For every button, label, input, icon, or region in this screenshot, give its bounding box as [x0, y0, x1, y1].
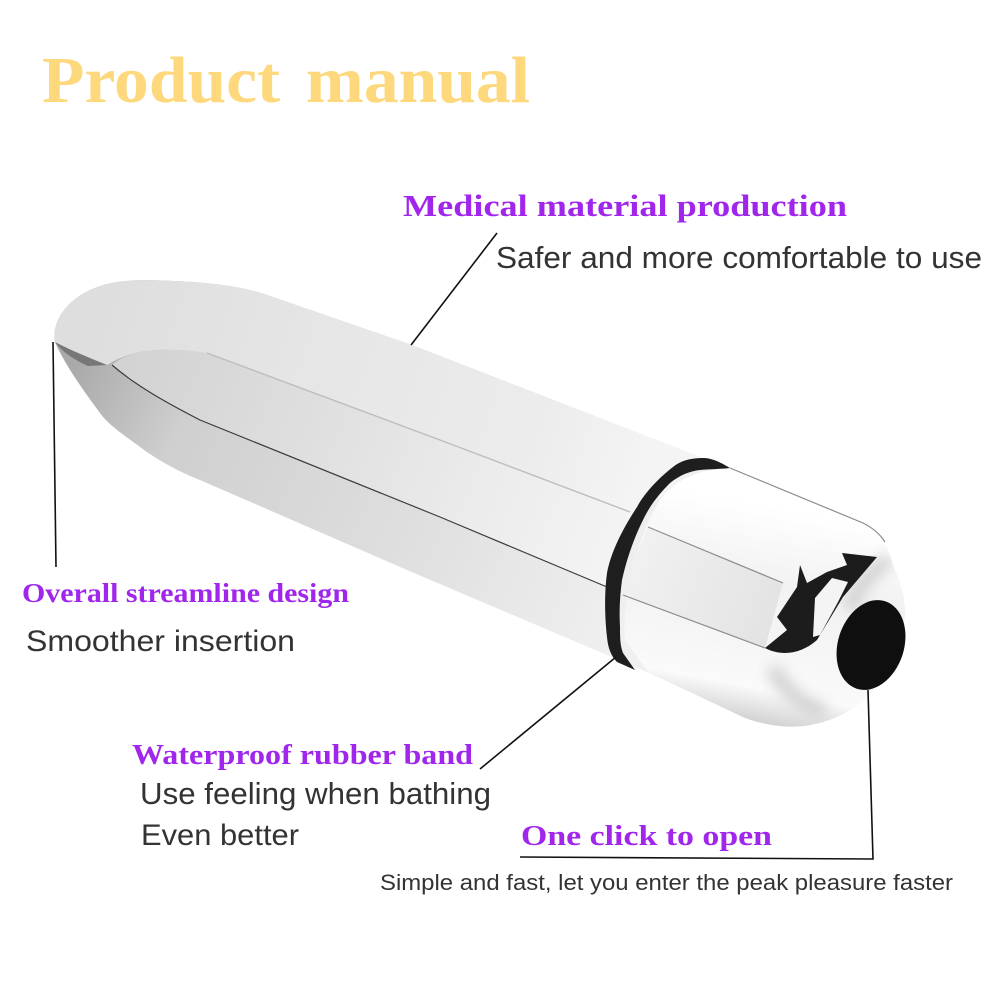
product: silver bullet body — [55, 280, 917, 727]
heading: Overall streamline design — [22, 578, 349, 608]
ring: rubber band — [605, 458, 730, 670]
description line 1: Use feeling when bathing — [140, 776, 491, 811]
body: upper highlight facet — [55, 280, 703, 516]
heading: Waterproof rubber band — [132, 739, 473, 771]
body: lower panel seam — [112, 365, 607, 587]
callout: streamline design — [22, 342, 349, 658]
callout: one click — [380, 690, 953, 895]
callout: waterproof band — [132, 657, 616, 852]
body: tip shadow — [55, 342, 107, 366]
cap: mirror reflection — [765, 553, 877, 653]
body: middle facet — [112, 350, 640, 590]
description: Simple and fast, let you enter the peak pleasure faster — [380, 870, 953, 895]
cap: reflection highlight — [813, 578, 848, 637]
description: Safer and more comfortable to use — [496, 240, 982, 275]
description: Smoother insertion — [26, 625, 295, 658]
body: upper panel seam — [207, 353, 630, 512]
leader line — [520, 690, 873, 859]
callout: medical material — [403, 188, 982, 345]
description line 2: Even better — [141, 819, 299, 852]
cap: metal end — [625, 468, 905, 727]
cap: rounded end shading — [772, 560, 890, 712]
heading: One click to open — [521, 820, 772, 852]
cap: middle facet — [623, 527, 783, 648]
leader line — [480, 657, 616, 769]
heading: Medical material production — [403, 188, 847, 223]
button: black power button — [825, 591, 917, 699]
body: full silhouette — [55, 280, 905, 727]
cap: bevel shade — [772, 560, 890, 712]
leader line — [411, 233, 497, 345]
cap: seam lines — [623, 468, 885, 648]
title: Product manual — [42, 44, 530, 117]
leader line — [53, 342, 56, 567]
